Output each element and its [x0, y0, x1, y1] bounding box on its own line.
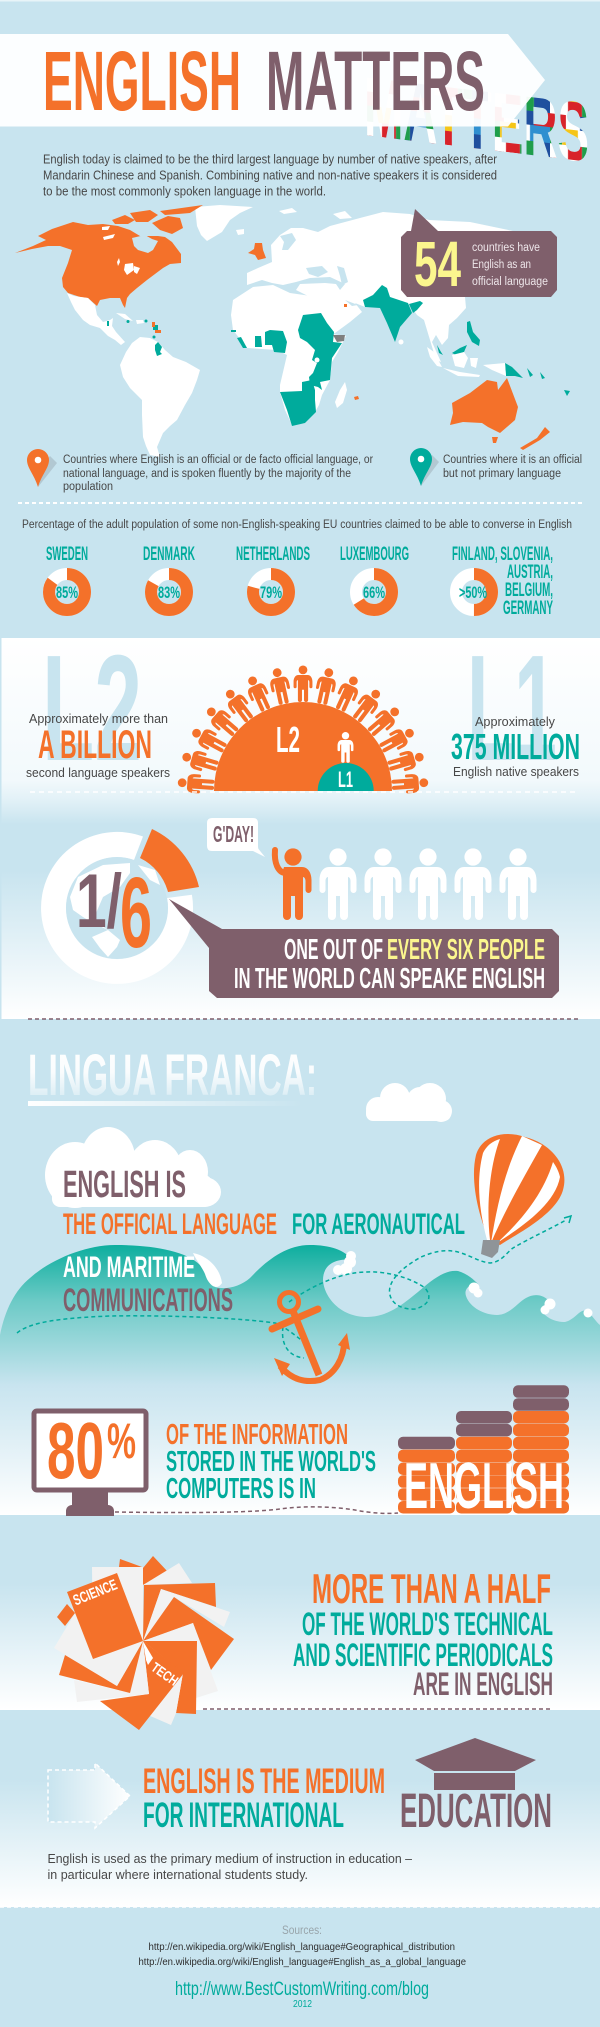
- graduation cap and education word: [400, 1738, 552, 1838]
- five white people: [320, 848, 536, 920]
- africa: [231, 285, 346, 425]
- intro text: Mandarin Chinese and Spanish. Combining native and non-native speakers it is considered: [43, 168, 497, 182]
- anchor: [272, 1292, 350, 1381]
- orange sixth wedge: [140, 829, 199, 892]
- one sixth figure: 6: [120, 857, 152, 969]
- monitor with 80%: [34, 1406, 146, 1516]
- L1 speakers text: [451, 714, 580, 779]
- caribbean and guyana official areas: [107, 320, 162, 356]
- donut: sweden 85%: [49, 574, 85, 610]
- intro text: to be the most commonly spoken language in the world.: [43, 184, 326, 198]
- donut: luxembourg 66%: [356, 574, 392, 610]
- cloud and wave copy: THE OFFICIAL LANGUAGE: [63, 1208, 277, 1241]
- basket: [481, 1240, 500, 1258]
- canadian arctic islands: [112, 205, 203, 234]
- education body text: [48, 1851, 413, 1882]
- callout: 54 countries: countries have: [472, 242, 540, 254]
- speech bubble: G'DAY!: [213, 821, 254, 847]
- country labels: DENMARK: [143, 544, 195, 565]
- one sixth figure: [76, 857, 152, 969]
- L2 speakers text: second language speakers: [26, 765, 170, 780]
- education copy: ENGLISH IS THE MEDIUM: [143, 1762, 385, 1801]
- english data stack: [398, 1385, 569, 1522]
- donut: over 50%: [456, 574, 492, 610]
- intro text: [43, 152, 498, 198]
- periodicals copy: [293, 1565, 553, 1702]
- australia, nz and small islands: [344, 304, 550, 450]
- cuba and caribbean: [116, 313, 144, 324]
- legend text: orange: population: [63, 481, 113, 493]
- legend text: orange: [63, 454, 373, 493]
- L2 speakers text: [26, 711, 170, 780]
- hudson bay and lakes: [102, 226, 158, 275]
- footer link: 2012: [293, 1999, 312, 2010]
- donut: luxembourg 66%: 66%: [363, 583, 385, 602]
- north america (USA and Canada): [15, 222, 181, 308]
- donut: sweden 85%: 85%: [56, 583, 78, 602]
- somaliland: [333, 335, 345, 342]
- eurasia: [247, 212, 520, 362]
- country labels: LUXEMBOURG: [340, 544, 409, 565]
- L1 semicircle with person: [318, 732, 374, 792]
- big L2 letters: L2: [42, 623, 142, 792]
- small cloud: [366, 1083, 452, 1122]
- sri lanka, indonesia, new guinea, madagascar: [335, 340, 506, 408]
- donut: over 50%: >50%: [459, 583, 487, 602]
- callout: 54 countries: 54: [414, 228, 461, 300]
- legend text: orange: Countries where English is an official or de facto official language, or: [63, 454, 373, 466]
- 80% copy: COMPUTERS IS IN: [166, 1473, 316, 1505]
- monitor with 80%: %: [107, 1413, 136, 1469]
- 80% copy: STORED IN THE WORLD'S: [166, 1446, 376, 1478]
- cloud and wave copy: FOR AERONAUTICAL: [292, 1208, 465, 1241]
- education body text: in particular where international students study.: [48, 1867, 308, 1882]
- donut: netherlands 79%: [253, 574, 289, 610]
- legend text: teal: but not primary language: [443, 468, 561, 480]
- L1 speakers text: Approximately: [475, 714, 555, 729]
- callout: 54 countries: English as an: [472, 259, 531, 271]
- greenland: [195, 205, 253, 241]
- education copy: FOR INTERNATIONAL: [143, 1796, 344, 1835]
- mexico and central america: [67, 293, 125, 345]
- legend text: orange: national language, and is spoken fluently by the majority of the: [63, 468, 351, 480]
- lingua franca heading: LINGUA FRANCA:: [28, 1043, 317, 1108]
- donut: denmark 83%: 83%: [158, 583, 180, 602]
- donut: denmark 83%: [151, 574, 187, 610]
- world map: [15, 205, 570, 457]
- science and tech pinwheel: TECH: [148, 1659, 181, 1689]
- callout: 54 countries: [401, 209, 557, 300]
- legend: orange pin: [27, 449, 57, 487]
- L2 speakers text: A BILLION: [38, 723, 152, 767]
- dotted flight path: [17, 1216, 571, 1358]
- monitor with 80%: 80: [47, 1406, 104, 1495]
- country labels: AUSTRIA,: [507, 562, 553, 583]
- legend text: teal: Countries where it is an official: [443, 454, 582, 466]
- footer link: [175, 1979, 429, 2010]
- speech bubble: [207, 818, 265, 857]
- teal countries: [231, 285, 570, 426]
- education body text: English is used as the primary medium of instruction in education –: [48, 1851, 413, 1866]
- globe ring: [41, 832, 193, 984]
- uk: [248, 243, 266, 260]
- large cloud: [45, 1127, 221, 1208]
- L2 speakers text: Approximately more than: [29, 711, 168, 726]
- L2 semicircle: L2: [276, 719, 300, 760]
- section background: periodicals: [0, 1515, 600, 1710]
- donut: netherlands 79%: 79%: [260, 583, 282, 602]
- science and tech pinwheel: SCIENCE: [71, 1576, 120, 1609]
- footer link: http://www.BestCustomWriting.com/blog: [175, 1979, 429, 2000]
- sources: [138, 1923, 466, 1968]
- lingua franca heading: [28, 1043, 317, 1108]
- cloud and wave copy: COMMUNICATIONS: [63, 1282, 233, 1318]
- inland seas and arctic islands: [236, 208, 358, 306]
- legend: teal pin: [410, 448, 439, 486]
- orange person waving: [275, 848, 312, 920]
- L1 semicircle with person: L1: [338, 767, 353, 792]
- one out of six callout: [169, 899, 559, 998]
- hot air balloon: [474, 1134, 564, 1258]
- L2 semicircle: [214, 702, 392, 791]
- section background: speakers and one in six: [0, 638, 600, 1019]
- 80% copy: OF THE INFORMATION: [166, 1419, 348, 1451]
- science and tech pinwheel: [54, 1556, 234, 1730]
- one sixth figure: 1/: [76, 859, 122, 944]
- education copy: [143, 1762, 385, 1835]
- people on semicircle: [177, 666, 429, 794]
- dashed arrow: [48, 1763, 130, 1828]
- country labels: GERMANY: [503, 598, 553, 619]
- callout: 54 countries: official language: [472, 276, 548, 288]
- section background: computers: [0, 1385, 600, 1515]
- sources: http://en.wikipedia.org/wiki/English_language#English_as_a_global_language: [138, 1957, 466, 1968]
- cloud and wave copy: AND MARITIME: [63, 1251, 195, 1284]
- cloud and wave copy: [63, 1164, 465, 1318]
- section background: education: [0, 1710, 600, 1907]
- sources: Sources:: [282, 1923, 322, 1937]
- country labels: [46, 544, 553, 619]
- one out of six callout: ONE OUT OF: [284, 934, 383, 966]
- 80% copy: [166, 1419, 376, 1505]
- intro text: English today is claimed to be the third largest language by number of native speakers, after: [43, 152, 498, 166]
- waves: [0, 1245, 600, 1385]
- country labels: NETHERLANDS: [236, 544, 310, 565]
- L1 speakers text: English native speakers: [453, 764, 579, 779]
- country labels: BELGIUM,: [505, 580, 553, 601]
- foam: [193, 1251, 592, 1318]
- lake victoria: [314, 358, 320, 362]
- title: ENGLISH: [43, 34, 241, 128]
- south america: [120, 337, 200, 457]
- legend text: teal: [443, 454, 582, 480]
- dashed connector: [115, 1507, 398, 1513]
- country labels: SWEDEN: [46, 544, 88, 565]
- title banner: [0, 34, 545, 126]
- sources: http://en.wikipedia.org/wiki/English_language#Geographical_distribution: [148, 1942, 455, 1953]
- cloud and wave copy: ENGLISH IS: [63, 1164, 186, 1206]
